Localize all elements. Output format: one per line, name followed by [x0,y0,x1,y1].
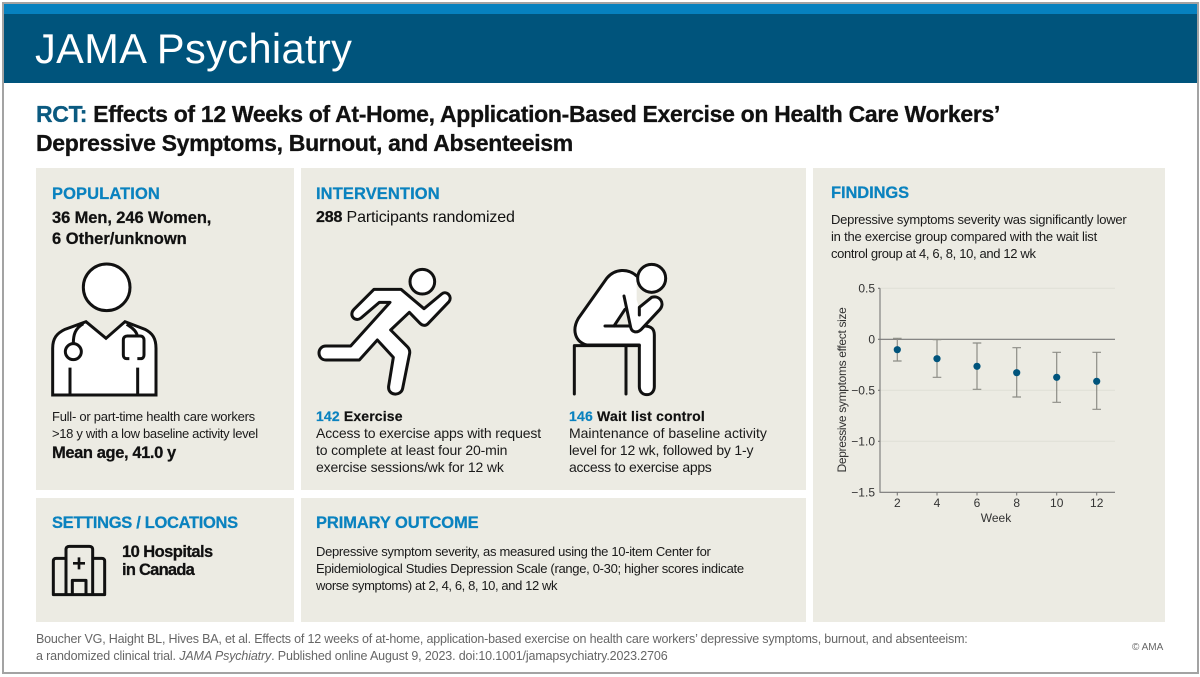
outcome text: worse symptoms) at 2, 4, 6, 8, 10, and 12 wk [316,578,557,592]
findings text: control group at 4, 6, 8, 10, and 12 wk [831,246,1036,261]
heading: population: POPULATION [52,184,160,202]
eligibility text: >18 y with a low baseline activity level [52,426,258,441]
arm: exercise: to complete at least four 20-min [316,442,507,458]
x axis labels: 2 [894,496,901,510]
y axis labels: −0.5 [851,384,875,398]
heading: primary outcome: PRIMARY OUTCOME [316,514,479,532]
x axis labels: 6 [974,496,981,510]
population counts: 36 Men, 246 Women, [52,208,211,226]
arm: wait list control: level for 12 wk, followed by 1-y [569,442,753,458]
data points [894,346,1100,385]
accent stripe [4,4,1197,14]
hospitals text: 10 Hospitals [122,543,213,561]
y axis labels: 0.5 [858,282,875,296]
hospitals text [122,543,213,579]
arm: wait list control: access to exercise apps [569,459,712,475]
eligibility text: Full- or part-time health care workers [52,409,255,424]
x axis labels: 4 [934,496,941,510]
panel: population [36,168,294,490]
panel: findings [813,168,1165,622]
header band [4,4,1197,83]
x axis labels: 12 [1090,496,1104,510]
journal name: JAMA Psychiatry [35,25,352,72]
arm: exercise: exercise sessions/wk for 12 wk [316,459,504,475]
y axis labels: 0 [868,332,875,346]
findings text: in the exercise group compared with the wait list [831,229,1097,244]
citation: Boucher VG, Haight BL, Hives BA, et al. Effects of 12 weeks of at-home, application-based exercise on health care workers’ depressive symptoms, burnout, and absenteeism: [36,632,968,646]
copyright: © AMA [1132,642,1163,653]
arm: exercise: 142 Exercise [316,408,403,424]
icon: health care worker [51,262,158,396]
arm: exercise: Access to exercise apps with request [316,425,541,441]
x axis labels: 8 [1013,496,1020,510]
panel: intervention [301,168,806,490]
heading: settings: SETTINGS / LOCATIONS [52,514,238,532]
title: RCT: Effects of 12 Weeks of At-Home, Application-Based Exercise on Health Care Workers’ [36,101,1000,127]
heading: intervention: INTERVENTION [316,184,440,202]
arm: exercise [316,408,542,475]
arm: wait list control: 146 Wait list control [569,408,705,424]
icon: seated person [572,262,668,396]
axes [878,288,1115,496]
panel: primary outcome [301,498,806,622]
icon: hospital [52,544,106,596]
findings text: Depressive symptoms severity was significantly lower [831,212,1126,227]
mean age: Mean age, 41.0 y [52,444,176,462]
citation [36,632,968,663]
panel: settings [36,498,294,622]
outcome text: Epidemiological Studies Depression Scale (range, 0-30; higher scores indicate [316,560,744,576]
title [36,101,1000,156]
x axis labels [894,496,1104,510]
y axis labels: −1.0 [851,434,875,448]
x axis labels: 10 [1050,496,1064,510]
eligibility text [52,409,258,441]
population counts [52,208,211,248]
hospitals text: in Canada [122,561,194,579]
outcome text: Depressive symptom severity, as measured using the 10-item Center for [316,544,711,558]
arm: wait list control [569,408,767,475]
title: Depressive Symptoms, Burnout, and Absenteeism [36,130,573,156]
population counts: 6 Other/unknown [52,230,187,248]
outcome text [316,544,744,592]
arm: wait list control: Maintenance of baseline activity [569,425,767,441]
icon: runner [318,268,452,396]
x axis title: Week [981,511,1012,525]
citation: a randomized clinical trial. JAMA Psychiatry. Published online August 9, 2023. doi:10.1001/jamapsychiatry.2023.2706 [36,649,668,663]
error bars [893,338,1101,409]
participants randomized: 288 Participants randomized [316,209,515,226]
y axis labels: −1.5 [851,486,875,500]
y axis labels [851,282,875,500]
heading: findings: FINDINGS [831,184,909,202]
y axis title: Depressive symptoms effect size [835,307,849,472]
findings text [831,212,1126,261]
